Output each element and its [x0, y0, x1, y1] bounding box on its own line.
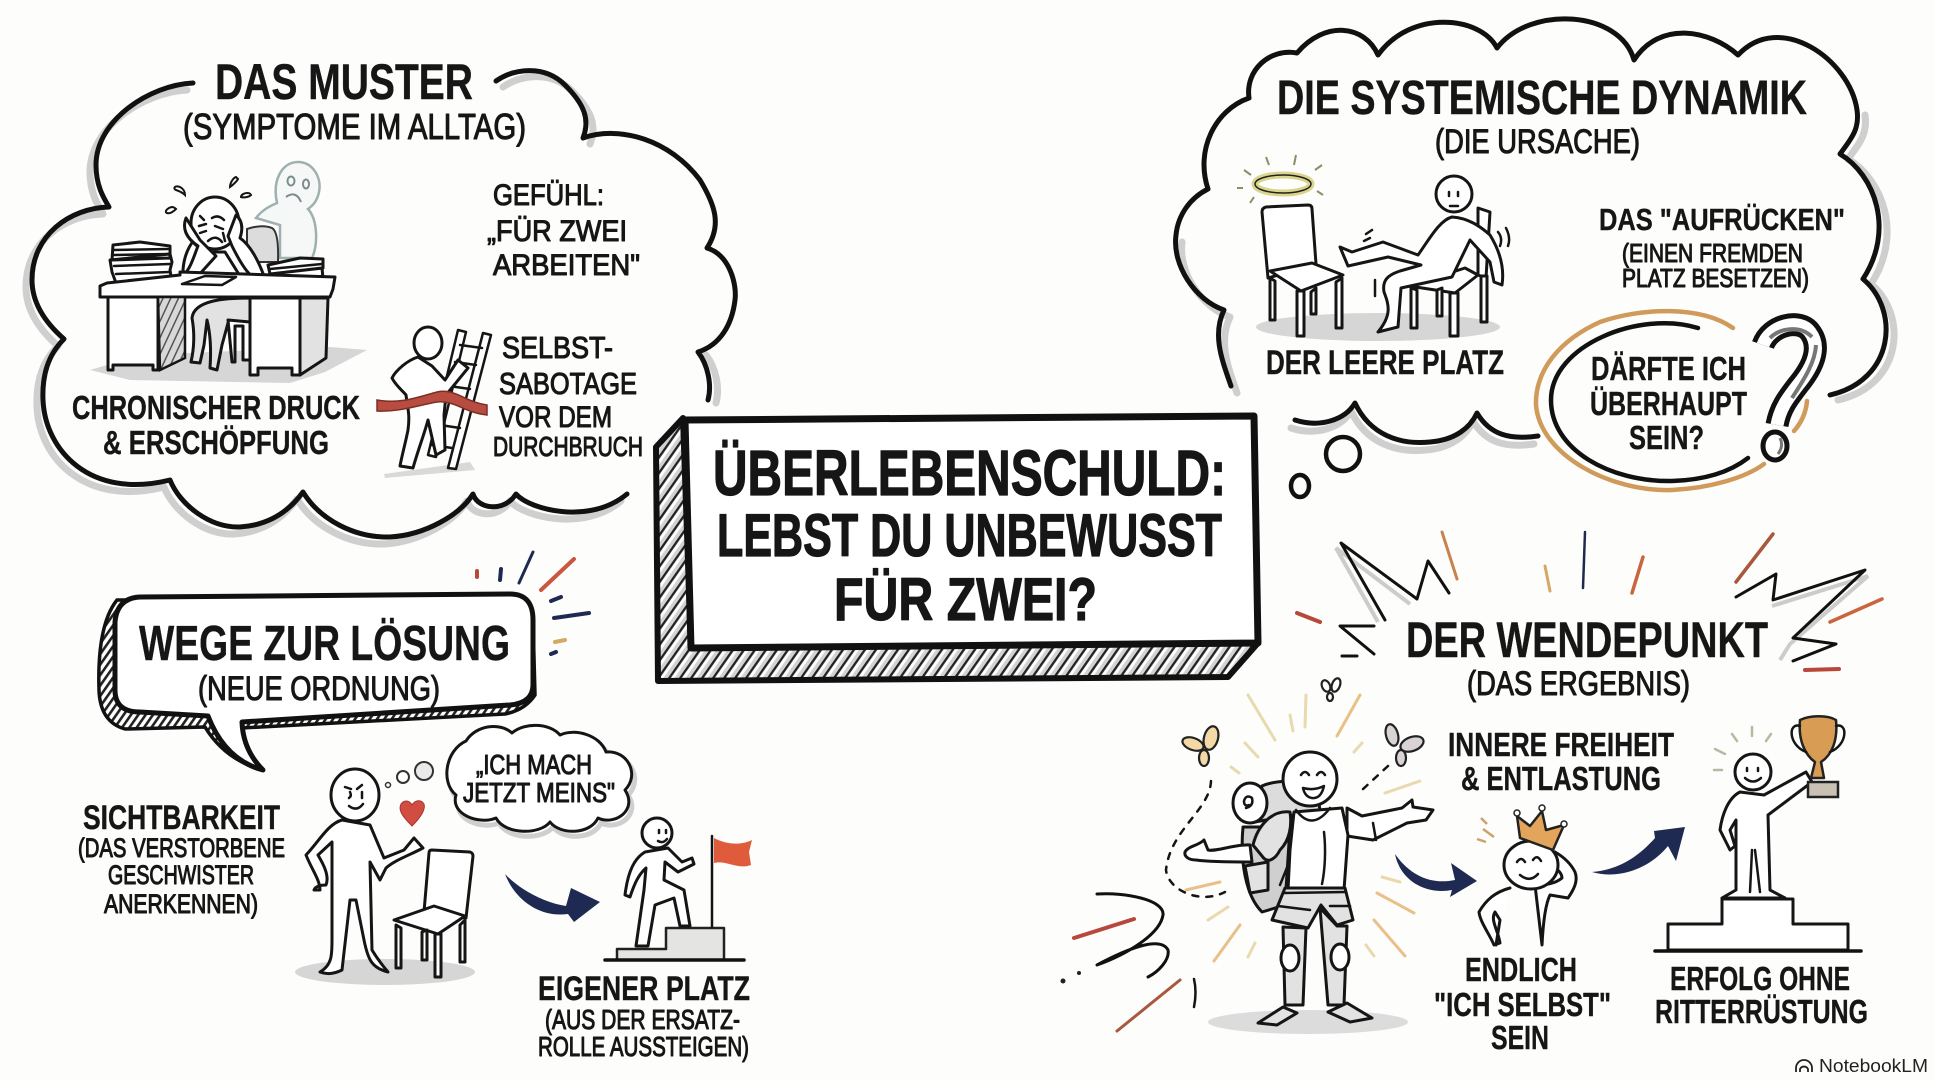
- icon: question mark: [1763, 325, 1816, 460]
- illustration: empty chair with halo and person on chair: [1237, 155, 1509, 341]
- panel: Der Wendepunkt: [1060, 532, 1882, 1056]
- label: Sichtbarkeit: [78, 799, 285, 919]
- label: Erfolg ohne Ritterrüstung: ERFOLG OHNE: [1670, 960, 1850, 997]
- label: Gefühl für zwei arbeiten: [487, 179, 640, 282]
- label: Chronischer Druck und Erschöpfung: & ERSCHÖPFUNG: [103, 424, 329, 461]
- label: Endlich ich selbst sein: ENDLICH: [1465, 951, 1577, 988]
- label: Selbstsabotage vor dem Durchbruch: VOR DEM: [499, 401, 612, 434]
- label: Sichtbarkeit: ANERKENNEN): [104, 889, 258, 919]
- label: Innere Freiheit: [1448, 726, 1674, 797]
- title: FÜR ZWEI?: [834, 566, 1097, 633]
- illustration: person with crown: [1477, 805, 1576, 945]
- heading: Wege zur Lösung: WEGE ZUR LÖSUNG: [139, 617, 510, 671]
- watermark: NotebookLM: NotebookLM: [1819, 1056, 1928, 1076]
- panel: Das Muster: [26, 54, 735, 544]
- box side with hatching: [656, 418, 1258, 681]
- label: Eigener Platz: ROLLE AUSSTEIGEN): [538, 1031, 749, 1062]
- label: Chronischer Druck und Erschöpfung: [72, 389, 360, 461]
- label: Erfolg ohne Ritterrüstung: RITTERRÜSTUNG: [1655, 993, 1868, 1030]
- label: Endlich ich selbst sein: "ICH SELBST": [1434, 986, 1611, 1023]
- label: Innere Freiheit: INNERE FREIHEIT: [1448, 726, 1674, 763]
- label: Eigener Platz: EIGENER PLATZ: [538, 970, 750, 1008]
- thought cloud: Ich mach jetzt meins: JETZT MEINS": [463, 777, 615, 808]
- label: Erfolg ohne Ritterrüstung: [1655, 960, 1868, 1030]
- label: Selbstsabotage vor dem Durchbruch: SELBST-: [502, 330, 613, 365]
- decorative spark lines: [477, 552, 589, 654]
- label: Eigener Platz: (AUS DER ERSATZ-: [545, 1004, 740, 1035]
- label: Der leere Platz: DER LEERE PLATZ: [1266, 344, 1504, 382]
- subheading: Symptome im Alltag: (SYMPTOME IM ALLTAG): [183, 106, 526, 147]
- thought cloud outline: [26, 71, 735, 544]
- box front: [685, 416, 1258, 648]
- callout: Därfte ich überhaupt sein: ÜBERHAUPT: [1590, 385, 1747, 422]
- panel: Die systemische Dynamik: [1176, 19, 1894, 497]
- label: Sichtbarkeit: GESCHWISTER: [108, 860, 254, 890]
- label: Selbstsabotage vor dem Durchbruch: [493, 330, 643, 462]
- label: Selbstsabotage vor dem Durchbruch: SABOTAGE: [499, 366, 637, 401]
- label: Innere Freiheit: & ENTLASTUNG: [1461, 760, 1661, 797]
- illustration: happy knight with backpack and butterflies: [1166, 677, 1433, 1034]
- label: Das Aufrücken: PLATZ BESETZEN): [1622, 263, 1809, 293]
- label: Das Aufrücken: DAS "AUFRÜCKEN": [1599, 202, 1845, 237]
- arrow: to own place: [505, 874, 600, 922]
- callout: Därfte ich überhaupt sein: DÄRFTE ICH: [1591, 350, 1746, 387]
- speech bubble: [99, 594, 535, 770]
- label: Endlich ich selbst sein: [1434, 951, 1611, 1056]
- heading: Die systemische Dynamik: DIE SYSTEMISCHE DYNAMIK: [1277, 72, 1807, 125]
- heading: Das Muster: DAS MUSTER: [215, 54, 473, 110]
- illustration: exhausted person at desk with ghost: [90, 162, 367, 383]
- thought cloud: Ich mach jetzt meins: [447, 725, 635, 836]
- label: Sichtbarkeit: SICHTBARKEIT: [83, 799, 280, 837]
- heading: Der Wendepunkt: DER WENDEPUNKT: [1406, 612, 1768, 668]
- label: Gefühl für zwei arbeiten: GEFÜHL:: [493, 179, 604, 212]
- title: LEBST DU UNBEWUSST: [717, 502, 1222, 569]
- burst lines: [1060, 532, 1882, 1031]
- title: [713, 437, 1226, 633]
- label: Das Aufrücken: [1599, 202, 1845, 293]
- label: Sichtbarkeit: (DAS VERSTORBENE: [78, 833, 285, 863]
- panel: Wege zur Lösung: [78, 552, 752, 1062]
- callout: Därfte ich überhaupt sein: SEIN?: [1629, 419, 1704, 456]
- label: Selbstsabotage vor dem Durchbruch: DURCHBRUCH: [493, 431, 643, 462]
- arrow: crowned self to podium: [1592, 827, 1685, 874]
- arrow: knight to crowned self: [1395, 854, 1477, 897]
- illustration: person on podium with trophy: [1655, 716, 1861, 951]
- label: Eigener Platz: [538, 970, 750, 1062]
- panel: central title box: [656, 416, 1258, 681]
- subheading: Das Ergebnis: (DAS ERGEBNIS): [1467, 665, 1690, 703]
- label: Gefühl für zwei arbeiten: ARBEITEN": [493, 249, 640, 282]
- label: Gefühl für zwei arbeiten: „FÜR ZWEI: [487, 215, 627, 248]
- subheading: Die Ursache: (DIE URSACHE): [1435, 123, 1640, 161]
- illustration: figure on ladder with red ribbon: [377, 327, 491, 478]
- subheading: Neue Ordnung: (NEUE ORDNUNG): [198, 670, 440, 708]
- label: Chronischer Druck und Erschöpfung: CHRONISCHER DRUCK: [72, 389, 360, 426]
- illustration: person greeting empty chair: [295, 762, 475, 985]
- thought cloud: Ich mach jetzt meins: „ICH MACH: [476, 749, 592, 780]
- title: ÜBERLEBENSCHULD:: [713, 437, 1226, 509]
- label: Das Aufrücken: (EINEN FREMDEN: [1622, 238, 1803, 268]
- label: Endlich ich selbst sein: SEIN: [1491, 1019, 1549, 1056]
- illustration: figure climbing stairs to flag: [605, 818, 752, 960]
- thought cloud outline: [1176, 19, 1894, 451]
- callout: Därfte ich überhaupt sein: [1536, 311, 1807, 490]
- thought bubbles: [1291, 437, 1360, 497]
